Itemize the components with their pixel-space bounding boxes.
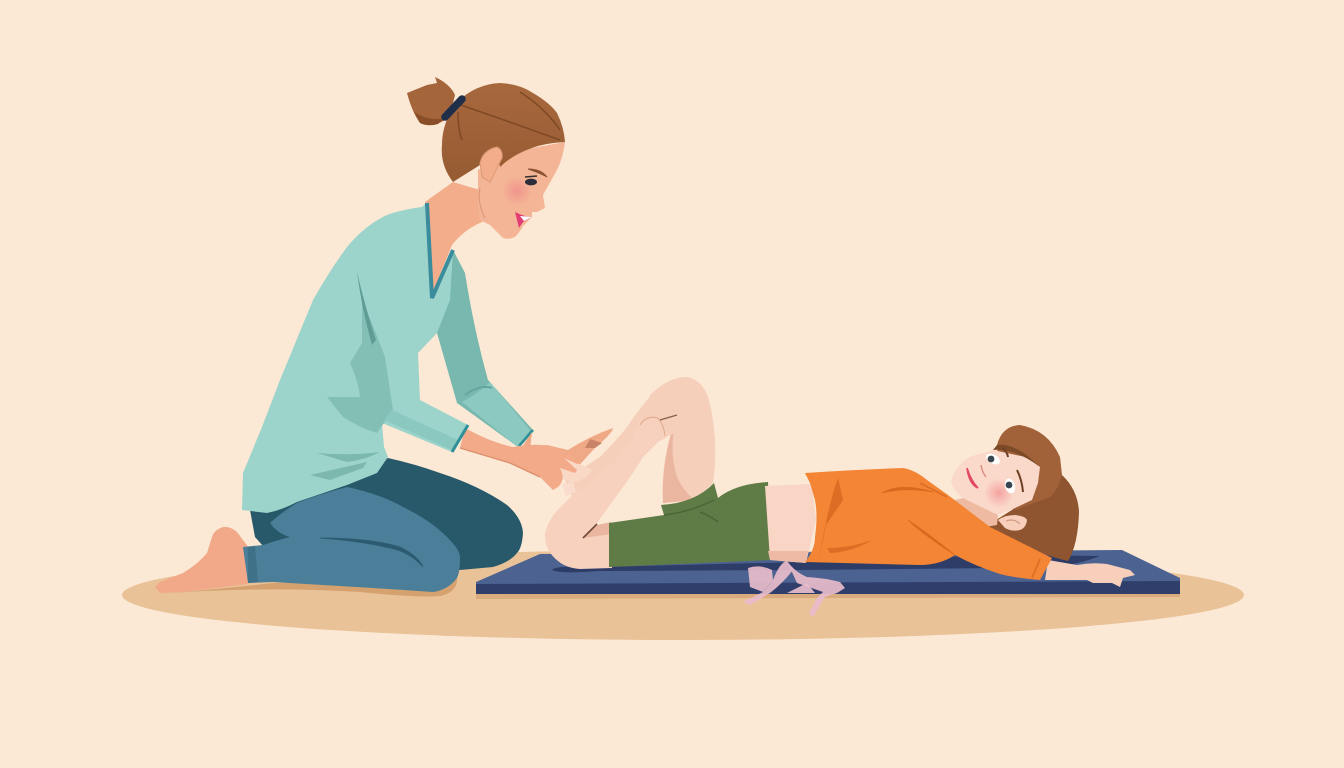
child shirt: [805, 468, 1052, 580]
woman shirt: [242, 202, 468, 513]
woman hair and bun: [407, 77, 565, 182]
floor ellipse: [122, 550, 1244, 640]
resistance band: [743, 561, 845, 617]
woman near leg: [243, 487, 460, 592]
child neck: [948, 498, 998, 527]
child raised leg: [565, 377, 715, 503]
woman far thigh: [250, 458, 523, 570]
child: [545, 377, 1135, 617]
exercise mat: [476, 550, 1180, 599]
woman head: [478, 142, 565, 239]
child hair: [985, 425, 1079, 561]
child face: [951, 445, 1040, 531]
woman foot: [155, 527, 249, 593]
floor shadow under woman: [158, 578, 457, 596]
woman neck: [425, 182, 487, 292]
child arm and hand: [1045, 560, 1135, 587]
child belly: [765, 484, 816, 563]
woman: [155, 77, 613, 593]
woman far sleeve: [430, 250, 533, 447]
woman far hand and near arm skin: [460, 428, 613, 496]
child near leg: [545, 415, 677, 569]
child shorts: [609, 482, 771, 567]
